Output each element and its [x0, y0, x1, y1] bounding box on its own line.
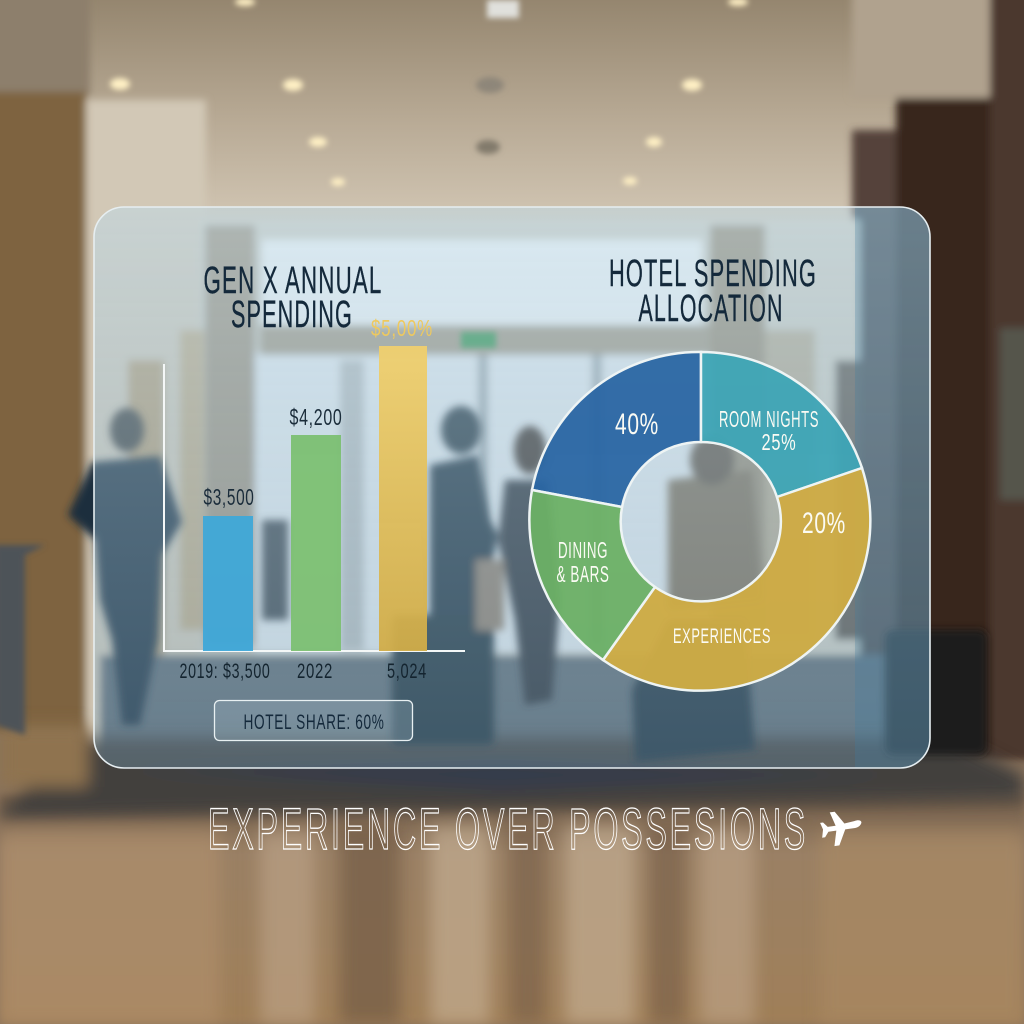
right heading: Hotel Spending Allocation — [609, 253, 817, 330]
left heading: Gen X Annual Spending: GEN X ANNUAL — [204, 260, 382, 302]
right heading: Hotel Spending Allocation: ALLOCATION — [638, 288, 784, 330]
donut labels: 40% — [615, 408, 659, 441]
exit sign — [461, 332, 496, 348]
reception desk — [0, 545, 45, 735]
callout: hotel share: HOTEL SHARE: 60% — [244, 711, 384, 734]
bar value labels — [204, 315, 433, 510]
axis labels: 2019: $3,500 — [180, 660, 270, 683]
chart axes — [164, 364, 465, 651]
left heading: Gen X Annual Spending — [204, 260, 382, 336]
donut labels: 20% — [802, 507, 846, 540]
donut labels: EXPERIENCES — [673, 625, 771, 648]
bar: 2019 — [203, 516, 253, 651]
axis labels: 5,024 — [387, 660, 427, 683]
segment: room nights teal — [701, 352, 862, 497]
donut labels — [556, 406, 846, 648]
callout: hotel share — [214, 700, 412, 740]
segment: experiences gold — [603, 468, 870, 691]
right heading: Hotel Spending Allocation: HOTEL SPENDING — [609, 253, 817, 295]
segment: 40% blue — [532, 352, 701, 507]
bar: 2024 — [379, 346, 427, 651]
bar value labels: $3,500 — [204, 484, 254, 510]
segment: dining green — [529, 490, 655, 660]
glass panel — [94, 207, 930, 768]
axis labels — [180, 660, 427, 683]
donut labels: ROOM NIGHTS — [719, 406, 819, 432]
ceiling lights — [110, 0, 748, 186]
bar: 2022 — [291, 435, 341, 651]
donut labels: DINING — [558, 537, 608, 563]
bar chart — [164, 315, 465, 683]
axis labels: 2022 — [297, 660, 333, 683]
blurred people — [68, 406, 987, 762]
donut labels: & BARS — [556, 561, 610, 587]
left heading: Gen X Annual Spending: SPENDING — [231, 294, 353, 336]
bar value labels: $4,200 — [290, 404, 342, 430]
donut labels: 25% — [762, 429, 796, 455]
donut chart — [529, 352, 870, 691]
icon: airplane — [819, 808, 864, 848]
bar value labels: $5,00% — [371, 315, 433, 341]
